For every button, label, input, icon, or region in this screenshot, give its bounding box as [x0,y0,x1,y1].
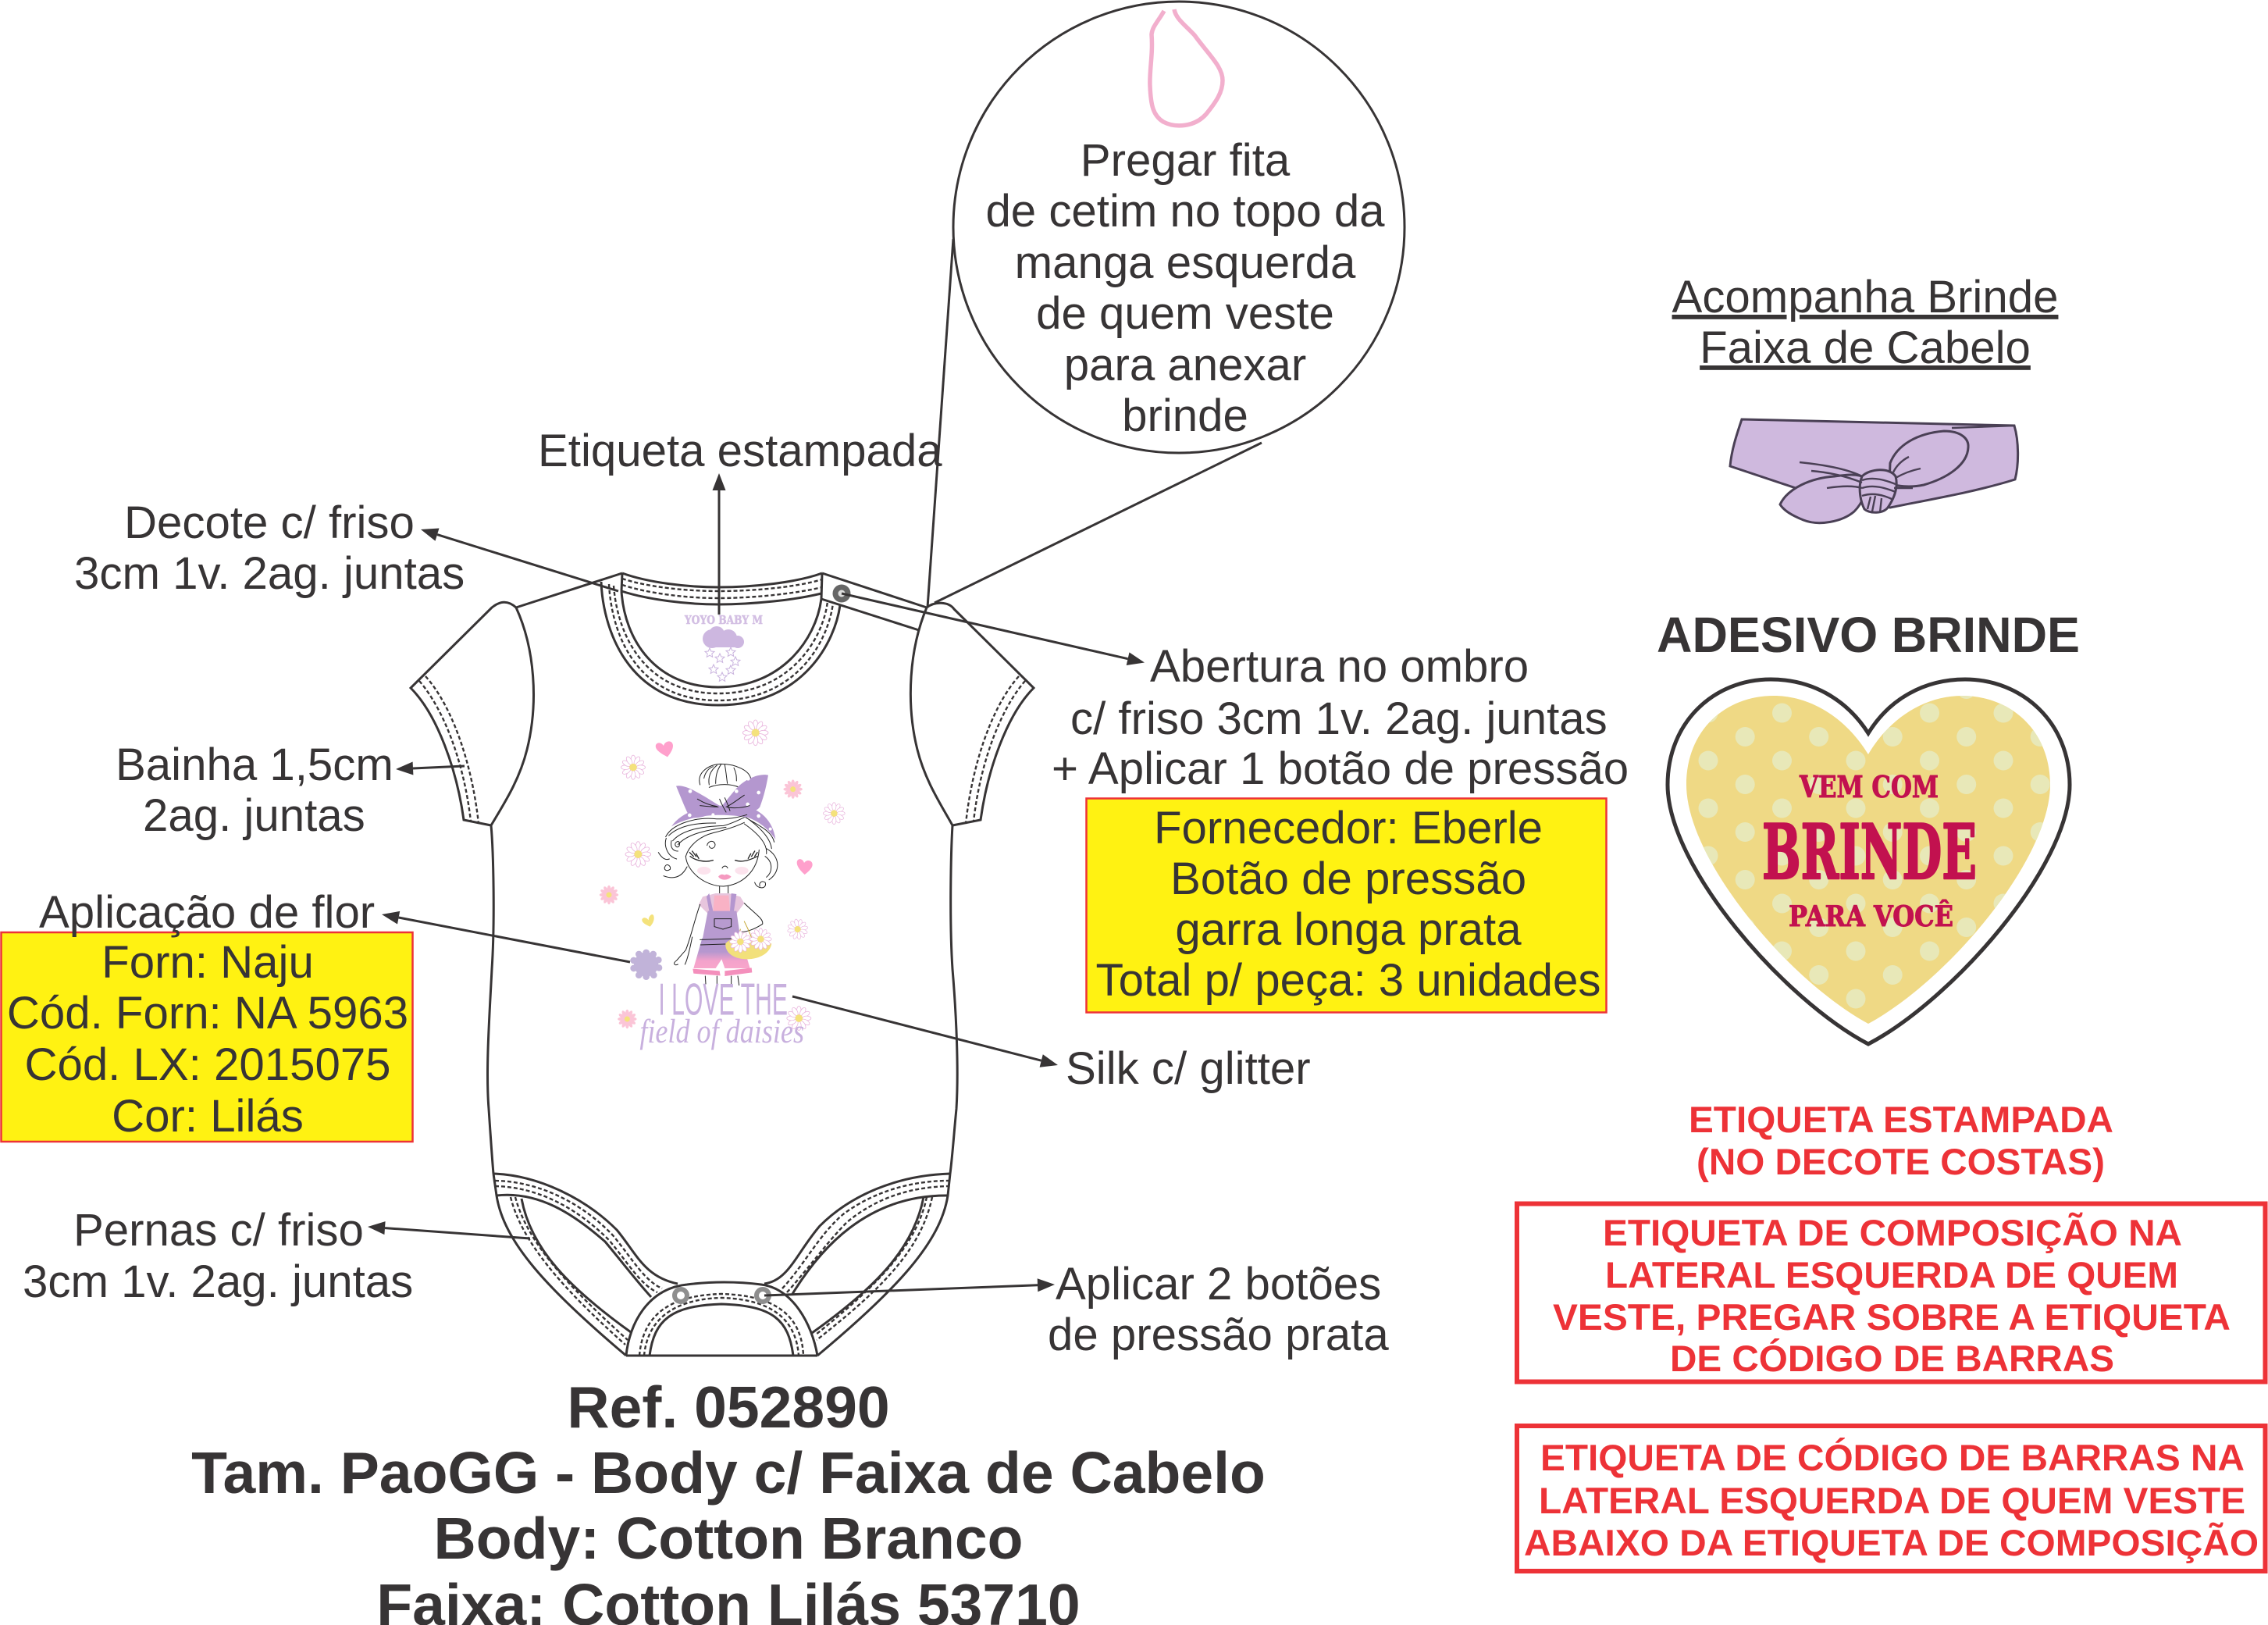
print slogan [639,975,804,1050]
label: bainha: Bainha 1,5cm [116,739,393,790]
arrow: decote [421,528,618,591]
label: pernas: 3cm 1v. 2ag. juntas [23,1256,413,1307]
arrow: abertura no ombro [842,593,1145,665]
yellow box: snap supplier [1087,798,1607,1012]
label: abertura no ombro: c/ friso 3cm 1v. 2ag. juntas [1070,693,1608,744]
heart polka dots [1686,696,2050,1024]
red note: etiqueta estampada: ETIQUETA ESTAMPADA [1689,1099,2113,1140]
label: decote [74,497,465,599]
circle text: manga esquerda [1015,237,1356,288]
girl: hair and face [658,814,778,888]
red note: etiqueta estampada [1689,1099,2113,1182]
neck label print: YOYO BABY M: YOYO BABY M [684,613,763,627]
daisies [600,720,849,1031]
title block: reference: Ref. 052890 [567,1374,890,1440]
circle text: para anexar [1064,340,1306,390]
yellow box: snap supplier: Botão de pressão [1170,853,1526,904]
girl: bandana [671,775,775,839]
icon: satin ribbon loop [1150,9,1223,126]
arrow: bainha [396,762,465,775]
red note: etiqueta estampada: (NO DECOTE COSTAS) [1697,1141,2105,1182]
title block: reference: Tam. PaoGG - Body c/ Faixa de Cabelo [191,1440,1266,1506]
circle text [985,135,1385,441]
title block: reference [191,1374,1266,1625]
red box: etiqueta de composição: ETIQUETA DE COMPOSIÇÃO NA [1603,1212,2182,1253]
sticker text: VEM COM [1799,769,1939,804]
heading: adesivo brinde: ADESIVO BRINDE [1657,607,2080,663]
yellow box: flower supplier: Cód. Forn: NA 5963 [7,988,408,1039]
heart outer outline [1668,679,2070,1044]
purple flower appliqué [630,950,662,980]
sticker text [1762,769,1977,933]
label: etiqueta estampada: Etiqueta estampada [538,426,942,476]
callout connector lines [927,239,1262,608]
arrow: aplicação de flor [382,911,630,962]
crotch snap band [626,1282,817,1356]
neckline with stitching [601,573,840,705]
red box: etiqueta de código de barras: ETIQUETA DE CÓDIGO DE BARRAS NA [1540,1437,2245,1478]
heading: acompanha brinde: Faixa de Cabelo [1700,323,2031,373]
label: silk: Silk c/ glitter [1066,1043,1311,1094]
red box: etiqueta de composição: VESTE, PREGAR SOBRE A ETIQUETA [1553,1296,2231,1338]
label: abertura no ombro: + Aplicar 1 botão de pressão [1052,743,1629,794]
circle text: Pregar fita [1081,135,1291,186]
girl: outfit [675,886,771,985]
sticker text: BRINDE [1762,808,1977,896]
red box: etiqueta de composição [1517,1204,2266,1382]
icon: headband [1730,419,2018,523]
sticker text: PARA VOCÊ [1789,900,1953,933]
print slogan: I LOVE THE [658,975,788,1025]
label: pernas [23,1205,413,1307]
arrow: botões de pressão [764,1278,1055,1295]
label: aplicar botões [1048,1259,1389,1360]
yellow box: snap supplier: garra longa prata [1175,904,1522,955]
chest print: girl with daisies [600,720,849,1050]
arrow: silk [792,996,1058,1067]
yellow box: flower supplier [2,932,412,1142]
label: abertura no ombro: Abertura no ombro [1150,641,1529,692]
circle outline [953,2,1405,453]
sticker: heart [1668,679,2070,1044]
detail circle: satin ribbon [927,2,1405,608]
left sleeve [411,602,533,825]
leg bindings with stitching [493,1174,950,1356]
label: bainha [116,739,393,841]
circle text: brinde [1122,390,1248,441]
red box: etiqueta de código de barras: LATERAL ESQUERDA DE QUEM VESTE [1539,1480,2245,1521]
yellow box: snap supplier: Total p/ peça: 3 unidades [1096,955,1600,1006]
red box: etiqueta de código de barras: ABAIXO DA ETIQUETA DE COMPOSIÇÃO [1524,1522,2259,1563]
label: aplicar botões: Aplicar 2 botões [1056,1259,1381,1310]
label: decote: 3cm 1v. 2ag. juntas [74,548,465,599]
circle text: de quem veste [1036,288,1334,339]
arrow: pernas [368,1221,530,1238]
label: decote: Decote c/ friso [124,497,415,548]
label: abertura no ombro [1052,641,1629,794]
red box: etiqueta de código de barras [1517,1426,2266,1571]
label: aplicação de flor: Aplicação de flor [39,887,375,938]
heart yellow fill [1686,696,2050,1024]
body sides and shoulders [488,573,957,1174]
heading: acompanha brinde: Acompanha Brinde [1672,272,2058,323]
red box: etiqueta de composição: DE CÓDIGO DE BARRAS [1670,1338,2114,1379]
hearts [642,741,813,927]
circle text: de cetim no topo da [985,186,1385,237]
red box: etiqueta de composição: LATERAL ESQUERDA DE QUEM [1605,1254,2178,1295]
heading: acompanha brinde [1672,272,2058,373]
label: bainha: 2ag. juntas [143,790,365,841]
girl: hair bun [700,764,751,787]
yellow box: flower supplier: Cód. LX: 2015075 [24,1039,391,1090]
print slogan: field of daisies [639,1013,804,1050]
title block: reference: Body: Cotton Branco [433,1506,1024,1571]
garment: bodysuit flat sketch [411,573,1034,1356]
arrow: etiqueta estampada [712,473,726,615]
yellow box: flower supplier: Cor: Lilás [112,1091,304,1142]
label: aplicar botões: de pressão prata [1048,1310,1389,1360]
yellow box: flower supplier: Forn: Naju [101,937,314,988]
yellow box: snap supplier: Fornecedor: Eberle [1154,803,1543,853]
snaps: crotch and shoulder [675,587,848,1302]
right sleeve [910,603,1034,825]
neck label print: YOYO BABY M [684,613,763,681]
label: pernas: Pernas c/ friso [73,1205,364,1256]
